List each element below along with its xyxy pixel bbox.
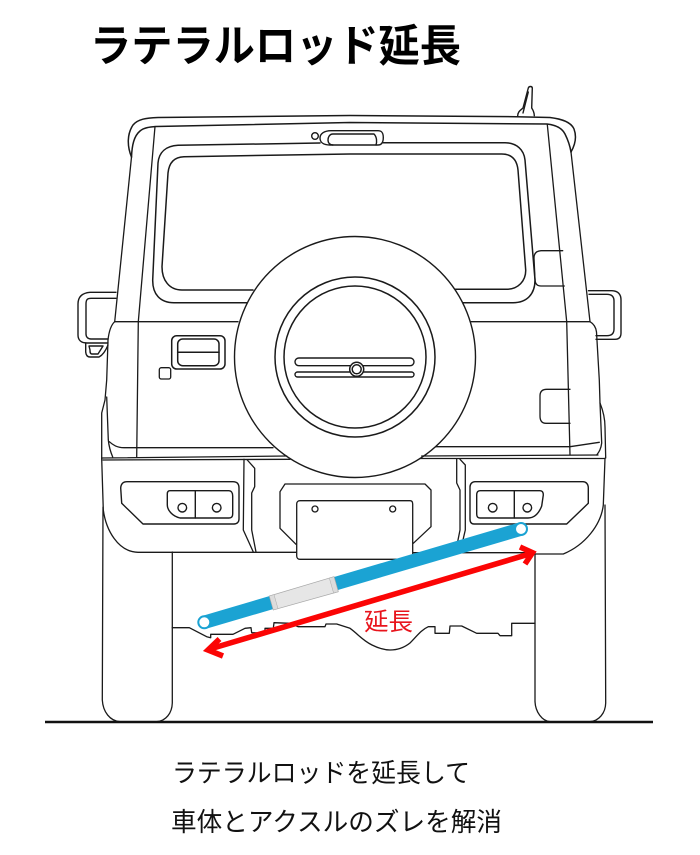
rear bumper — [102, 455, 605, 554]
ground line — [45, 721, 653, 723]
left rear tire — [102, 507, 172, 722]
caption line 2: 車体とアクスルのズレを解消 — [171, 807, 502, 837]
extension label: 延長 — [364, 608, 413, 636]
title: ラテラルロッド延長 — [90, 22, 461, 71]
body pillars and belt line — [102, 124, 606, 459]
antenna — [518, 86, 534, 116]
roof — [128, 116, 575, 157]
extension arrow — [208, 547, 532, 656]
axle housing — [172, 623, 535, 650]
rod right eye — [515, 523, 527, 535]
caption line 1: ラテラルロッドを延長して — [172, 758, 470, 788]
right fuel-lid panel — [540, 389, 570, 423]
vehicle rear line drawing — [78, 86, 621, 722]
right side window panel — [534, 251, 564, 286]
left side mirror — [78, 292, 116, 357]
right side mirror — [588, 291, 621, 339]
rod left eye — [198, 616, 210, 628]
left tail lamp — [121, 482, 239, 524]
small square marker — [159, 368, 171, 379]
right rear tire — [535, 505, 606, 722]
rear window — [153, 143, 535, 303]
license plate holder — [280, 484, 431, 559]
rod extension sleeve — [269, 577, 338, 610]
rod blue shaft — [204, 529, 521, 622]
caption — [171, 758, 502, 837]
lateral rod — [198, 523, 527, 628]
high-mount stop lamp — [312, 131, 383, 145]
right tail lamp — [470, 482, 588, 524]
spare tire — [234, 236, 476, 478]
door handle — [172, 336, 225, 369]
